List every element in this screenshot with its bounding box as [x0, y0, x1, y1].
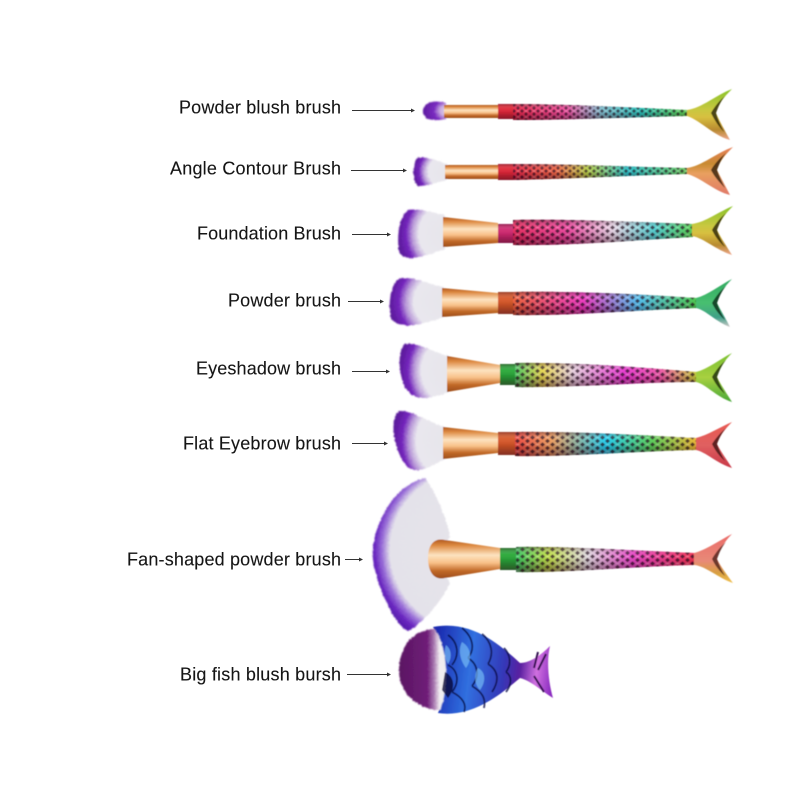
label: Fan-shaped powder brush: Fan-shaped powder brush — [127, 550, 341, 570]
brush: eyeshadow — [400, 344, 732, 402]
label: Foundation Brush: Foundation Brush — [197, 224, 341, 244]
brush: fan-shaped — [373, 478, 733, 631]
brush: big fish — [399, 626, 553, 714]
brush: powder — [390, 278, 732, 327]
brush: angle contour — [413, 147, 733, 195]
label: Powder brush: Powder brush — [228, 290, 341, 310]
label: Powder blush brush — [179, 98, 415, 118]
label: Powder blush brush: Powder blush brush — [179, 98, 341, 118]
label: Angle Contour Brush: Angle Contour Brush — [170, 158, 341, 178]
brush: powder blush — [423, 89, 732, 140]
label: Big fish blush bursh: Big fish blush bursh — [180, 664, 341, 684]
fish scales — [448, 628, 510, 712]
brush: flat eyebrow — [393, 411, 732, 470]
brush: foundation — [398, 206, 733, 258]
label: Flat Eyebrow brush: Flat Eyebrow brush — [183, 434, 341, 454]
label: Eyeshadow brush: Eyeshadow brush — [196, 358, 341, 378]
